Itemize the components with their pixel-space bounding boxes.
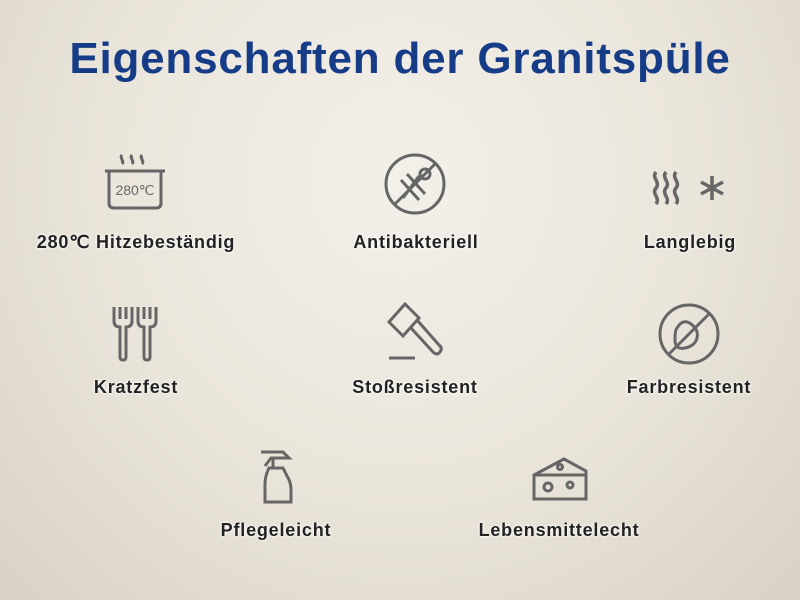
icon: spray bottle [261, 450, 292, 504]
label: Lebensmittelecht: Lebensmittelecht [479, 520, 639, 540]
icon: hammer [387, 302, 443, 360]
icon: waves and star [652, 171, 724, 205]
icon: cheese [532, 457, 588, 500]
label: Stoßresistent: Stoßresistent [352, 377, 478, 397]
label: Farbresistent: Farbresistent [627, 377, 751, 397]
label: Langlebig: Langlebig [644, 232, 736, 252]
icon: forks [112, 307, 158, 362]
icon: antibacterial [384, 154, 446, 214]
label: Kratzfest: Kratzfest [94, 377, 178, 397]
label: Antibakteriell: Antibakteriell [353, 232, 479, 252]
icon: pot 280°C: 280℃ [115, 182, 155, 198]
title: Eigenschaften der Granitspüle [69, 34, 731, 83]
label: Pflegeleicht: Pflegeleicht [221, 520, 331, 540]
icon: stain resistant [658, 304, 720, 364]
label: 280°C Hitzebeständig: 280℃ Hitzebeständig [37, 232, 235, 252]
icon: pot 280°C [105, 154, 165, 210]
